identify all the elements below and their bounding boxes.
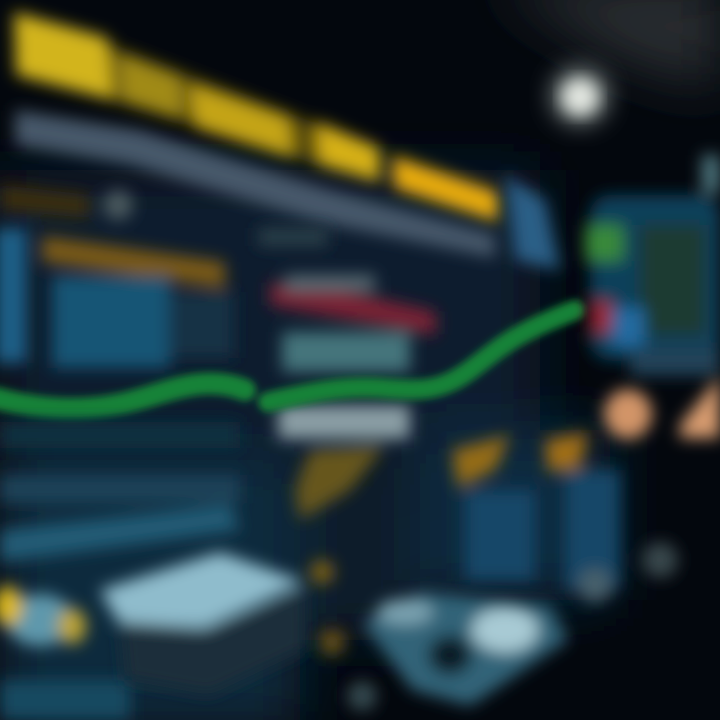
left column: orange heading and blue panels — [0, 185, 234, 368]
lower left: yellow indicators — [0, 586, 86, 646]
subheading band — [15, 110, 560, 270]
headline band — [14, 12, 498, 222]
ceiling lamp — [552, 68, 608, 124]
lower left: data rows — [0, 422, 240, 720]
center column: table rows — [258, 228, 436, 520]
keypad device: lower right — [362, 592, 568, 706]
line chart: green trend — [0, 310, 575, 409]
monitor: right side display — [585, 155, 720, 376]
right panels: amber markers and blue bars — [452, 432, 678, 602]
laptop: lower center — [100, 552, 305, 695]
hands: skin tones — [604, 375, 720, 439]
small amber dots — [310, 560, 377, 711]
